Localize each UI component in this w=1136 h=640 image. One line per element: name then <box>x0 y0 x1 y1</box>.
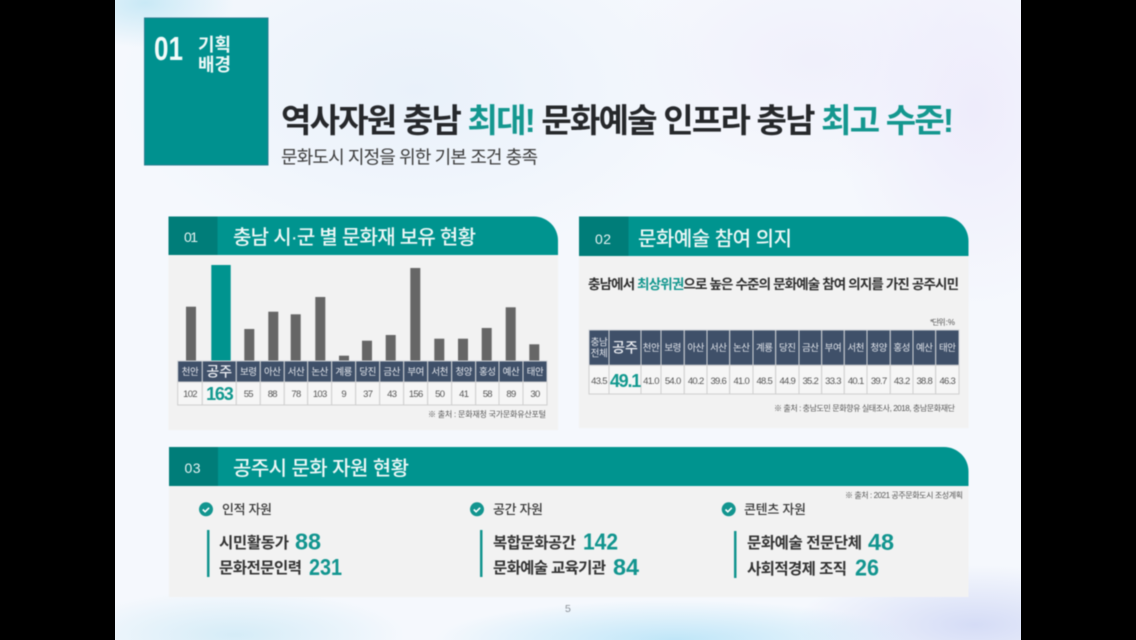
group: content resources: 사회적경제 조직 <box>747 560 847 578</box>
data table: participation by city: 43.2 <box>894 376 910 387</box>
data table: participation by city: 39.7 <box>871 376 887 387</box>
group: human resources: 인적 자원 <box>222 502 272 517</box>
icon: check 1 <box>199 502 213 516</box>
data table: holdings by city: 계룡 <box>335 366 353 378</box>
data table: holdings by city: 부여 <box>407 366 424 378</box>
data table: participation by city: 공주 <box>612 340 638 356</box>
data table: holdings by city: 홍성 <box>479 366 496 378</box>
group: content resources: 48 <box>868 529 894 555</box>
group: space resources: 142 <box>583 528 618 554</box>
lead sentence: 충남에서 최상위권으로 높은 수준의 문화예술 참여 의지를 가진 공주시민 <box>588 277 959 292</box>
data table: holdings by city: 102 <box>183 389 197 400</box>
data table: holdings by city: 서산 <box>288 367 305 378</box>
group: content resources <box>722 502 894 580</box>
group: content resources: 26 <box>855 554 879 580</box>
unit note: *단위 : % <box>930 317 955 327</box>
data table: holdings by city: 50 <box>435 389 445 400</box>
data table: participation by city: 계룡 <box>756 342 773 354</box>
data table: holdings by city: 163 <box>206 384 234 404</box>
data table: participation by city: 논산 <box>733 343 750 354</box>
data table: participation by city: 54.0 <box>665 376 681 387</box>
data table: participation by city: 부여 <box>825 342 841 354</box>
section badge: 배경 <box>198 55 231 75</box>
panel 3 header <box>169 447 968 486</box>
panel 2 header <box>579 216 968 256</box>
source note 1: ※ 출처 : 문화재청 국가문화유산포털 <box>428 409 546 419</box>
section badge: 01 <box>154 30 183 67</box>
page number: 5 <box>565 603 571 615</box>
slide background <box>115 0 1021 640</box>
data table: holdings by city: 156 <box>409 389 423 400</box>
icon: check 2 <box>470 502 484 516</box>
data table: participation by city: 38.8 <box>916 376 933 387</box>
data table: holdings by city: 태안 <box>527 367 544 378</box>
section badge: 기획 <box>198 35 231 55</box>
group: space resources <box>470 502 639 580</box>
data table: participation by city: 49.1 <box>610 371 641 391</box>
panel: arts participation <box>579 216 968 428</box>
data table: holdings by city: 아산 <box>264 367 281 378</box>
data table: holdings by city: 금산 <box>383 367 401 378</box>
source note 2: ※ 출처 : 충남도민 문화향유 실태조사, 2018, 충남문화재단 <box>774 403 956 413</box>
data table: participation by city: 홍성 <box>893 342 910 354</box>
data table: participation by city: 전체 <box>591 348 607 360</box>
data table: participation by city: 서산 <box>710 343 727 354</box>
panel 1 header: 충남 시·군 별 문화재 보유 현황 <box>233 226 476 249</box>
data table: participation by city: 48.5 <box>756 376 773 387</box>
data table: holdings by city: 서천 <box>431 367 448 378</box>
group: content resources: 콘텐츠 자원 <box>744 502 806 517</box>
data table: participation by city: 보령 <box>664 342 681 354</box>
data table: participation by city: 43.5 <box>591 376 607 387</box>
data table: participation by city: 예산 <box>916 343 933 354</box>
data table: holdings by city: 41 <box>459 389 469 400</box>
data table: participation by city: 당진 <box>779 343 796 354</box>
group: content resources: 문화예술 전문단체 <box>747 534 862 552</box>
panel: cultural resources <box>169 447 968 597</box>
group: human resources: 문화전문인력 <box>219 559 302 577</box>
data table: holdings by city: 37 <box>363 389 373 400</box>
data table: participation by city: 충남 <box>591 338 608 348</box>
group: space resources: 공간 자원 <box>493 502 543 517</box>
panel 3 header: 공주시 문화 자원 현황 <box>233 457 409 480</box>
panel 1 header <box>168 216 558 255</box>
data table: holdings by city: 예산 <box>503 367 520 378</box>
data table: holdings by city: 당진 <box>359 367 376 378</box>
data table: participation by city: 천안 <box>643 343 660 354</box>
data table: participation by city: 태안 <box>939 343 956 354</box>
data table: holdings by city: 공주 <box>206 364 232 380</box>
data table: participation by city: 41.0 <box>643 376 659 387</box>
group: human resources: 시민활동가 <box>219 534 289 552</box>
data table: participation by city: 서천 <box>847 343 864 354</box>
data table: participation by city: 39.6 <box>710 376 727 387</box>
data table: participation by city: 35.2 <box>802 376 819 387</box>
data table: holdings by city <box>178 361 547 405</box>
panel: cultural heritage holdings <box>168 216 558 430</box>
subtitle: 문화도시 지정을 위한 기본 조건 충족 <box>281 148 538 168</box>
panel 2 header: 문화예술 참여 의지 <box>638 228 792 250</box>
data table: participation by city: 청양 <box>870 343 888 354</box>
group: space resources: 문화예술 교육기관 <box>493 559 606 577</box>
data table: participation by city: 44.9 <box>779 376 796 387</box>
data table: holdings by city: 103 <box>313 389 327 400</box>
panel 1 header: 01 <box>184 229 198 245</box>
bar chart <box>186 265 539 361</box>
data table: holdings by city: 9 <box>341 389 346 400</box>
group: human resources: 88 <box>295 528 321 554</box>
group: space resources: 84 <box>613 554 639 580</box>
data table: holdings by city: 58 <box>483 389 492 400</box>
group: space resources: 복합문화공간 <box>493 534 576 552</box>
title: 역사자원 충남 최대! 문화예술 인프라 충남 최고 수준! <box>281 102 954 139</box>
data table: holdings by city: 보령 <box>240 366 257 378</box>
source note 3: ※ 출처 : 2021 공주문화도시 조성계획 <box>845 490 963 500</box>
data table: holdings by city: 천안 <box>182 367 199 378</box>
data table: participation by city: 40.2 <box>688 376 704 387</box>
data table: participation by city: 금산 <box>802 343 819 354</box>
data table: holdings by city: 43 <box>387 389 397 400</box>
data table: holdings by city: 30 <box>530 389 540 400</box>
panel 3 header: 03 <box>184 460 201 476</box>
data table: holdings by city: 88 <box>268 389 277 400</box>
data table: participation by city: 41.0 <box>733 376 750 387</box>
data table: participation by city: 33.3 <box>825 376 841 387</box>
group: human resources <box>199 502 342 580</box>
icon: check 3 <box>722 502 736 516</box>
data table: holdings by city: 청양 <box>455 367 473 378</box>
data table: participation by city: 40.1 <box>848 376 864 387</box>
data table: holdings by city: 55 <box>244 389 253 400</box>
data table: holdings by city: 89 <box>506 389 516 400</box>
data table: holdings by city: 78 <box>291 389 301 400</box>
data table: holdings by city: 논산 <box>311 367 329 378</box>
panel 2 header: 02 <box>595 231 611 247</box>
data table: participation by city: 아산 <box>687 343 705 354</box>
data table: participation by city: 46.3 <box>939 376 956 387</box>
group: human resources: 231 <box>309 554 342 580</box>
data table: participation by city <box>589 330 959 394</box>
section badge <box>144 18 268 165</box>
